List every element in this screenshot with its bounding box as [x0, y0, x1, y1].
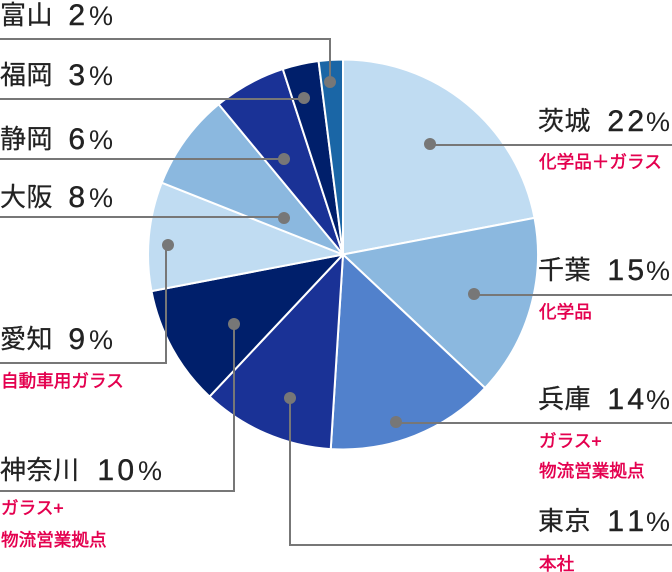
leader: 福岡 — [0, 92, 310, 104]
label: 神奈川 10%: 10 — [97, 454, 134, 487]
label: 富山 2%: 富山 — [0, 0, 53, 30]
pie chart — [148, 60, 538, 449]
slice: 兵庫 14% — [331, 254, 485, 449]
label: 千葉 15%: 15 — [607, 254, 644, 287]
label: 神奈川 10%: 神奈川 — [0, 455, 80, 485]
label: 静岡 6%: 静岡 — [0, 124, 53, 154]
label: 愛知 9%: 愛知 — [0, 324, 53, 354]
leader: 大阪 — [0, 212, 290, 224]
leader: 神奈川 — [0, 318, 240, 491]
slice: 神奈川 10% — [151, 254, 343, 397]
slice: 福岡 3% — [283, 61, 343, 255]
label: 兵庫 14%: % — [646, 385, 670, 415]
label: 茨城 22%: 茨城 — [538, 106, 591, 136]
leader: 東京 — [284, 392, 672, 545]
sublabel: 化学品＋ガラス: 化学品＋ガラス — [539, 152, 662, 172]
label: 愛知 9%: % — [89, 325, 113, 355]
leader: 千葉 — [468, 288, 672, 300]
sublabel: 自動車用ガラス: 自動車用ガラス — [1, 371, 124, 391]
label: 千葉 15%: 千葉 — [538, 255, 591, 285]
leader: 静岡 — [0, 153, 290, 165]
label: 大阪 8%: % — [89, 183, 113, 213]
sublabel: 化学品: 化学品 — [539, 302, 592, 322]
label: 千葉 15%: % — [646, 256, 670, 286]
label: 茨城 22%: % — [646, 107, 670, 137]
label: 福岡 3%: 3 — [68, 59, 85, 92]
sublabel: 物流営業拠点: 物流営業拠点 — [1, 530, 107, 550]
leader: 富山 — [0, 39, 336, 88]
label: 茨城 22%: 22 — [607, 105, 644, 138]
label: 静岡 6%: % — [89, 125, 113, 155]
slice: 静岡 6% — [219, 69, 343, 254]
slice: 茨城 22% — [343, 60, 535, 255]
label: 大阪 8%: 大阪 — [0, 182, 53, 212]
label: 東京 11%: 11 — [607, 505, 644, 538]
sublabel: 物流営業拠点: 物流営業拠点 — [539, 461, 645, 481]
leader: 愛知 — [0, 239, 174, 363]
sublabel: ガラス+: ガラス+ — [539, 431, 602, 451]
slice: 大阪 8% — [162, 104, 343, 255]
sublabel: ガラス+: ガラス+ — [1, 498, 64, 518]
leader: 兵庫 — [390, 416, 672, 428]
slice: 富山 2% — [319, 60, 343, 254]
label: 兵庫 14%: 兵庫 — [538, 384, 591, 414]
slice: 千葉 15% — [343, 218, 538, 388]
leader: 茨城 — [424, 138, 672, 150]
label: 愛知 9%: 9 — [68, 323, 85, 356]
label: 大阪 8%: 8 — [68, 181, 85, 214]
label: 福岡 3%: % — [89, 61, 113, 91]
label: 東京 11%: 東京 — [538, 506, 591, 536]
slice: 愛知 9% — [148, 183, 343, 291]
slice: 東京 11% — [210, 254, 343, 449]
label: 神奈川 10%: % — [138, 456, 162, 486]
label: 兵庫 14%: 14 — [607, 383, 644, 416]
label: 東京 11%: % — [646, 507, 670, 537]
label: 静岡 6%: 6 — [68, 123, 85, 156]
label: 福岡 3%: 福岡 — [0, 60, 53, 90]
label: 富山 2%: % — [89, 1, 113, 31]
